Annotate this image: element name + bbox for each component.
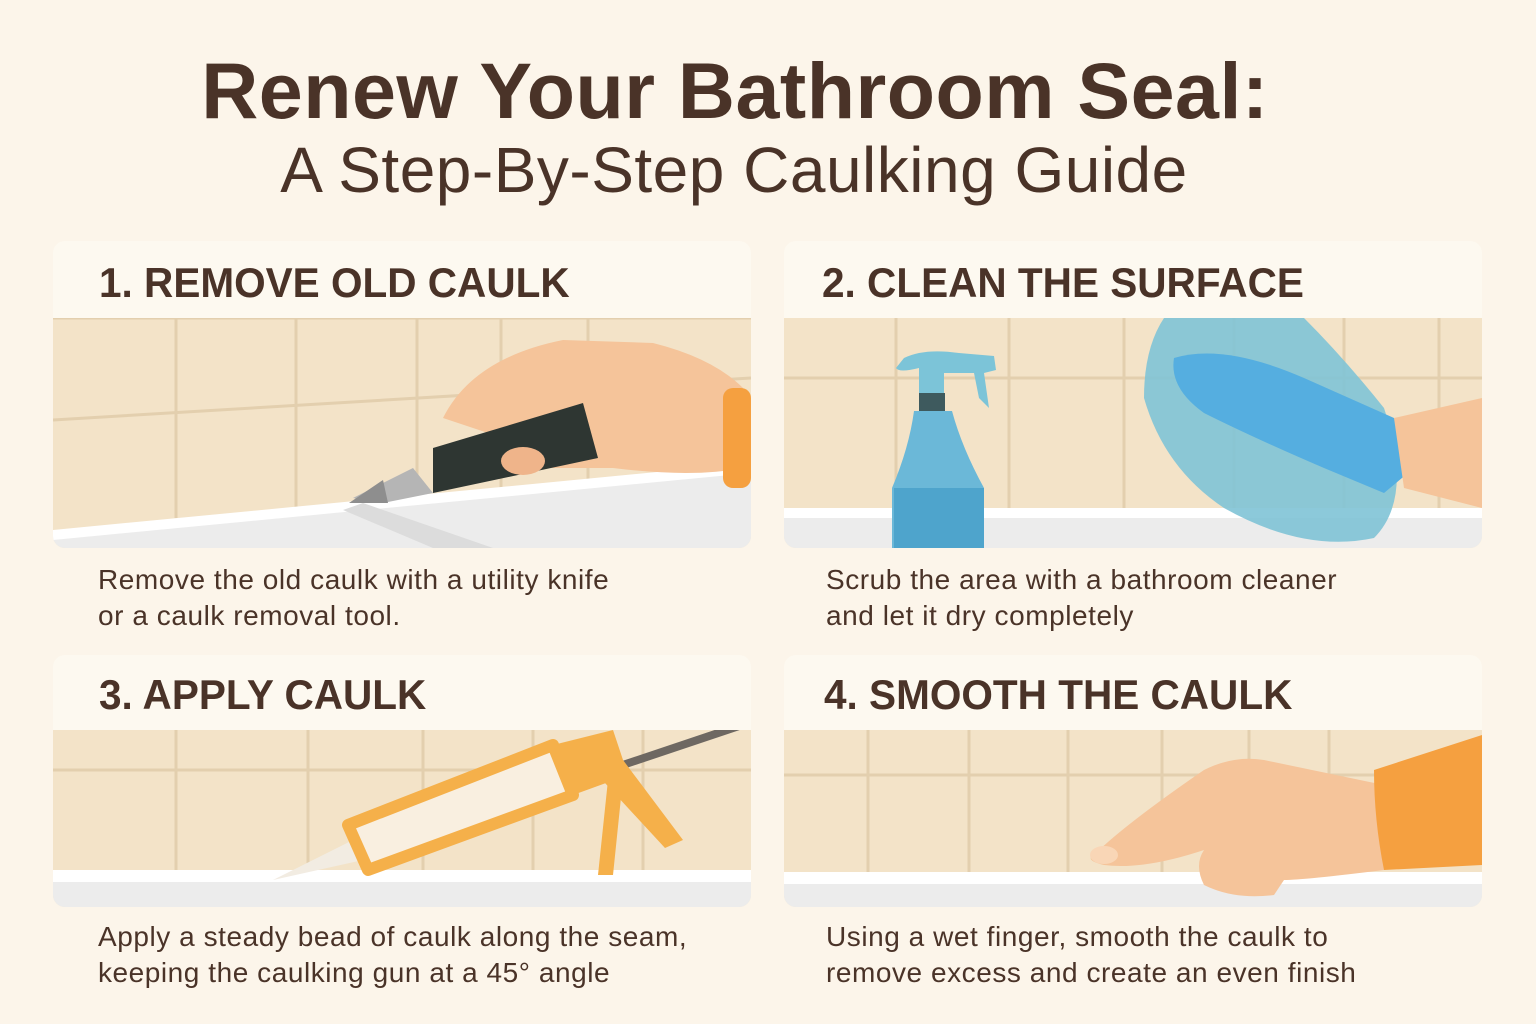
heading: step 1: 1. REMOVE OLD CAULK bbox=[99, 259, 570, 306]
description: step 4 bbox=[826, 921, 1356, 988]
panel: step 3 bbox=[53, 655, 751, 907]
heading: step 2: 2. CLEAN THE SURFACE bbox=[822, 259, 1304, 306]
panel: step 4 bbox=[784, 655, 1482, 907]
description: step 3 bbox=[98, 921, 687, 988]
description: step 1 bbox=[98, 564, 609, 631]
description: step 4: remove excess and create an even finish bbox=[826, 957, 1356, 988]
illustration: caulk gun bbox=[53, 730, 751, 907]
heading: step 3: 3. APPLY CAULK bbox=[99, 671, 426, 718]
illustration: spray and glove bbox=[784, 318, 1482, 548]
panel: step 2 bbox=[784, 241, 1482, 548]
subtitle: A Step-By-Step Caulking Guide bbox=[280, 134, 1188, 206]
panel: step 1 bbox=[53, 241, 751, 548]
description: step 4: Using a wet finger, smooth the caulk to bbox=[826, 921, 1328, 952]
title: Renew Your Bathroom Seal: bbox=[201, 46, 1269, 135]
description: step 2: and let it dry completely bbox=[826, 600, 1134, 631]
description: step 3: Apply a steady bead of caulk along the seam, bbox=[98, 921, 687, 952]
heading: step 4: 4. SMOOTH THE CAULK bbox=[824, 671, 1292, 718]
illustration: remove caulk bbox=[53, 318, 751, 548]
description: step 1: or a caulk removal tool. bbox=[98, 600, 401, 631]
illustration: finger smoothing bbox=[784, 730, 1482, 907]
description: step 3: keeping the caulking gun at a 45° angle bbox=[98, 957, 610, 988]
description: step 2 bbox=[826, 564, 1337, 631]
description: step 1: Remove the old caulk with a utility knife bbox=[98, 564, 609, 595]
description: step 2: Scrub the area with a bathroom cleaner bbox=[826, 564, 1337, 595]
